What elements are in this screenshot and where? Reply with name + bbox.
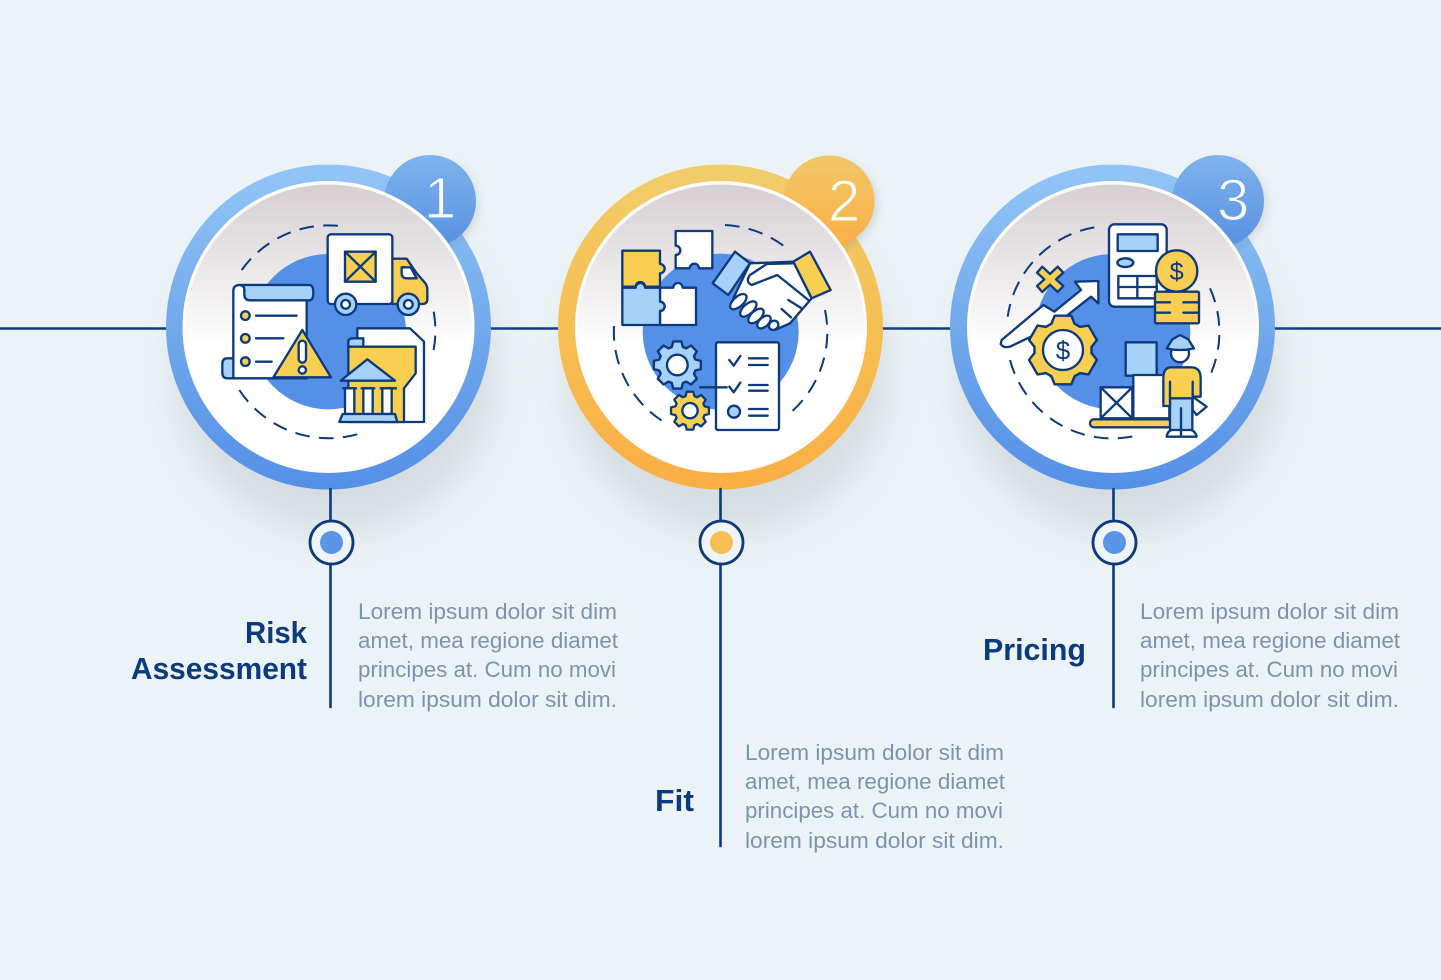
icon: calculator with coins [1109, 224, 1199, 323]
text block: step 3 description: amet, mea regione diamet [1140, 628, 1400, 653]
text block: step 1 description: principes at. Cum no movi [358, 657, 616, 682]
icon: dollar gear: $ [1056, 335, 1071, 365]
badge: number 2: 2 [828, 169, 860, 234]
text block: step 2 description [745, 740, 1005, 853]
icon: multiply sign [1037, 267, 1063, 292]
text block: step 3 description: lorem ipsum dolor sit dim. [1140, 687, 1399, 712]
icon: puzzle pieces [622, 231, 712, 325]
connector and marker: step 2 [700, 489, 743, 846]
connector and marker: step 3 [1093, 489, 1136, 707]
badge: number 1 [384, 155, 478, 249]
icon: handshake [713, 252, 831, 332]
text block: step 1 description [358, 599, 618, 712]
text block: step 1 description: Lorem ipsum dolor sit dim [358, 599, 617, 624]
text block: step 2 description: lorem ipsum dolor sit dim. [745, 828, 1004, 853]
badge: number 3: 3 [1217, 168, 1249, 233]
icon: folder and bank building [339, 328, 424, 422]
panel: step 3 circle [950, 155, 1280, 532]
heading: Risk Assessment: Assessment [131, 651, 307, 686]
icon: pricing illustration [1001, 224, 1219, 438]
icon: boxes on pallet [1090, 342, 1172, 427]
text block: step 1 description: lorem ipsum dolor sit dim. [358, 687, 617, 712]
panel: step 2 circle [558, 156, 888, 532]
icon: checklist [700, 342, 779, 430]
text block: step 3 description: principes at. Cum no movi [1140, 657, 1398, 682]
heading: Pricing: Pricing [983, 632, 1086, 667]
heading: Risk Assessment [131, 615, 308, 686]
badge: number 3 [1172, 155, 1266, 249]
badge: number 2 [784, 156, 877, 249]
text block: step 3 description: Lorem ipsum dolor sit dim [1140, 599, 1399, 624]
heading: Fit: Fit [655, 783, 694, 818]
badge: number 1: 1 [424, 166, 456, 231]
icon: worker with helmet [1163, 335, 1207, 437]
connector and marker: step 1 [310, 489, 353, 707]
icon: delivery truck [328, 234, 427, 315]
text block: step 2 description: amet, mea regione diamet [745, 769, 1005, 794]
icon: gears [654, 341, 709, 430]
icon: dollar gear [1029, 316, 1097, 384]
icon: rising arrow [1001, 281, 1098, 347]
icon: scroll document with warning [222, 285, 331, 378]
panel: step 1 circle [166, 155, 496, 532]
text block: step 2 description: principes at. Cum no movi [745, 798, 1003, 823]
icon: fit illustration [614, 225, 831, 430]
text: coin dollar sign: $ [1170, 258, 1184, 286]
heading: Risk Assessment: Risk [245, 615, 308, 650]
text block: step 3 description [1140, 599, 1400, 712]
text block: step 1 description: amet, mea regione diamet [358, 628, 618, 653]
icon: risk assessment illustration [222, 225, 435, 438]
text block: step 2 description: Lorem ipsum dolor sit dim [745, 740, 1004, 765]
horizontal timeline line [0, 327, 1441, 330]
